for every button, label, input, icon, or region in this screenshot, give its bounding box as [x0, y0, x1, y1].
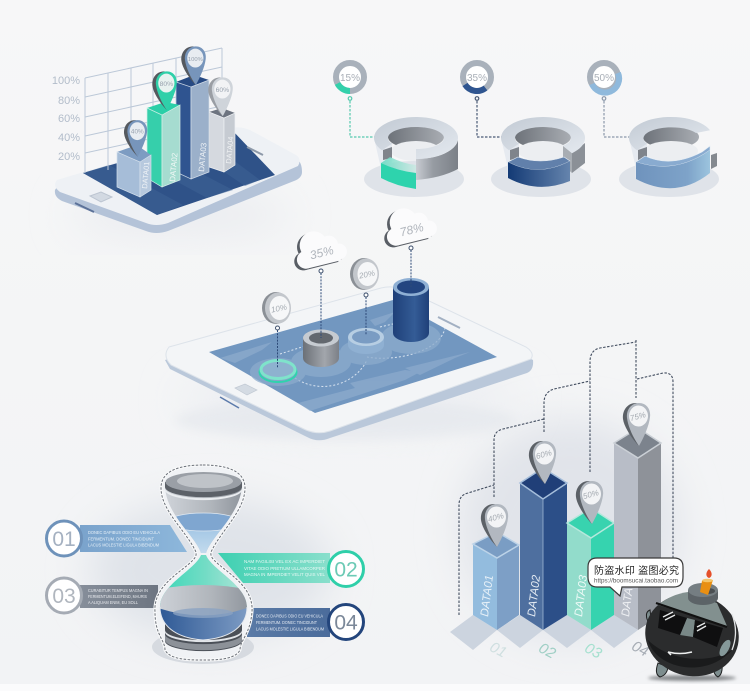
category labels: [487, 638, 651, 663]
badge: 10%: 10%: [270, 302, 288, 315]
mascot: bomb with sunglasses: [638, 569, 746, 685]
phone body: [55, 127, 302, 233]
cylinder: 35%: [303, 330, 339, 367]
bar: DATA01: [117, 145, 151, 197]
icon: home button: [90, 192, 112, 202]
ribbon 03: CURABITUR TEMPUS MAGNA IN: [88, 588, 148, 593]
watermark bubble: 防盗水印 盗图必究: [594, 564, 679, 577]
bar: DATA01: [473, 532, 519, 630]
dashed connectors: [459, 340, 673, 615]
bar: DATA04: DATA04: [620, 574, 637, 617]
axis labels: 80%: [58, 95, 80, 107]
ribbon 01: FERMENTUM. DONEC TINCIDUNT: [88, 536, 154, 542]
ribbon 02: VITAE ODIO PRETIUM ULLAMCORPER: [244, 566, 325, 571]
ribbon 02: NAM FAGILISI VEL EX AC IMPERDIET: [244, 559, 325, 564]
bar: DATA03: [567, 508, 614, 630]
bar: DATA02: [520, 468, 567, 630]
ribbon 01: DONEC DAPIBUS ODIO EU VEHICULA: [88, 530, 160, 535]
badge: 20%: [350, 258, 379, 290]
ribbon 04: DONEC DAPIBUS ODIO EU VEHICULA: [256, 614, 323, 618]
number 02: [328, 552, 364, 586]
pin: 40%: 40%: [487, 511, 505, 524]
stem caps: [276, 246, 413, 330]
cloud: 78%: [378, 201, 439, 249]
pin: 60%: 60%: [535, 448, 553, 461]
pin: 75%: 75%: [629, 410, 647, 423]
upper bulb: [165, 488, 242, 553]
category labels: 02: [536, 640, 559, 663]
badge: 20%: 20%: [357, 268, 376, 281]
pin: 60%: [208, 77, 233, 116]
ribbon 04: FERMENTUM. DONEC TINCIDUNT: [256, 620, 317, 625]
ribbon 04: LACUS MOLESTIE LIGULA BIBENDUM: [256, 626, 324, 632]
panel: donut 50%: [590, 63, 719, 197]
bar: DATA04: [209, 108, 235, 172]
ribbon 02: [218, 553, 330, 583]
pin: 100%: [181, 46, 206, 85]
category labels: 01: [487, 639, 509, 661]
bar: DATA01: DATA01: [479, 574, 496, 617]
panel: donut 15%: [336, 63, 464, 197]
panel: hourglass: [46, 465, 364, 664]
top cap: [165, 472, 242, 500]
pin: 40%: [124, 120, 147, 157]
number 02: 02: [334, 558, 358, 582]
stems: [278, 250, 411, 368]
pin: 50%: 50%: [582, 488, 600, 501]
pin: 75%: [623, 403, 650, 446]
ribbon 01: [80, 525, 187, 552]
candle: [700, 569, 713, 595]
axis labels: 20%: [58, 151, 80, 163]
cloud: 78%: 78%: [398, 220, 425, 239]
base: [165, 622, 242, 651]
grid: [85, 48, 222, 173]
base rings: [250, 322, 441, 386]
bar: DATA03: [176, 75, 209, 179]
bar: DATA04: DATA04: [224, 136, 235, 164]
panel: tablet: [165, 201, 533, 440]
lower bulb: [160, 555, 248, 640]
ribbon 01: LACUS MOLESTIE LIGULA BIBENDUM: [88, 542, 159, 548]
ribbon 02: MAGNA IN IMPERDIET VELIT QUIS VEL: [244, 572, 326, 577]
bar: DATA02: DATA02: [526, 574, 543, 617]
ribbon 03: [80, 585, 158, 608]
bar: DATA02: DATA02: [168, 152, 180, 182]
ring: 10%: [260, 360, 296, 382]
pin: 40%: [481, 504, 508, 547]
pin: 80%: [152, 71, 177, 110]
connector: [348, 97, 384, 139]
pin: 50%: [576, 481, 603, 524]
body: [638, 585, 746, 685]
panel: isometric bar chart: [450, 340, 673, 663]
number 03: 03: [52, 585, 76, 608]
number 04: [328, 604, 364, 640]
pin: 60%: 60%: [216, 87, 229, 94]
axis labels: 100%: [52, 75, 80, 87]
axis labels: [52, 75, 80, 163]
ribbon 03: A ALIQUAM ENIM, EU SOLL: [88, 600, 139, 605]
tablet body: [165, 287, 533, 440]
pin: 80%: 80%: [160, 81, 173, 88]
floor tiles: [450, 615, 638, 650]
pin: 100%: 100%: [188, 57, 203, 63]
bar: DATA02: [147, 102, 180, 187]
neck: [688, 583, 718, 605]
axis labels: 60%: [58, 113, 80, 125]
sunglasses: [656, 603, 727, 647]
panel: phone bar chart: [52, 46, 302, 233]
bar: DATA04: [614, 428, 661, 630]
category labels: 04: [629, 638, 651, 660]
bar: DATA03: DATA03: [573, 574, 590, 617]
badge: 10%: [262, 292, 291, 324]
cylinder: 78%: [393, 278, 429, 342]
mouth: [668, 652, 692, 655]
cloud: 35%: 35%: [308, 243, 335, 262]
number 01: [46, 521, 82, 556]
ribbon 03: FERMENTUM.ELEIFEND, MAURIS: [88, 594, 147, 599]
bar: DATA03: DATA03: [197, 142, 209, 172]
number 03: [46, 578, 82, 613]
category labels: 03: [582, 640, 605, 663]
cloud: 35%: [288, 224, 349, 272]
donut chart: [619, 117, 719, 197]
watermark bubble: [588, 558, 683, 596]
bar: DATA01: DATA01: [140, 161, 151, 189]
watermark bubble: https://boomsucai.taobao.com: [594, 578, 678, 584]
connector: [475, 97, 510, 139]
icon: home button: [235, 384, 257, 395]
axis labels: 40%: [58, 132, 80, 144]
hourglass figure: [152, 465, 255, 664]
donut chart: [491, 117, 591, 197]
gauge: 35%: 35%: [467, 73, 487, 84]
gauge: 50%: 50%: [594, 73, 614, 84]
connector: [602, 97, 638, 139]
feet and ear: [646, 610, 722, 677]
number 04: 04: [334, 612, 358, 634]
ring: 20%: [348, 328, 384, 354]
ribbon 04: [247, 608, 330, 637]
gauge: 15%: 15%: [340, 73, 360, 84]
number 01: 01: [52, 528, 76, 551]
pin: 60%: [529, 441, 556, 484]
pin: 40%: 40%: [131, 129, 144, 136]
panel: donut 35%: [463, 63, 591, 197]
donut chart: [364, 117, 464, 197]
screen pattern: [220, 312, 470, 411]
dashed orbit: [280, 320, 445, 386]
